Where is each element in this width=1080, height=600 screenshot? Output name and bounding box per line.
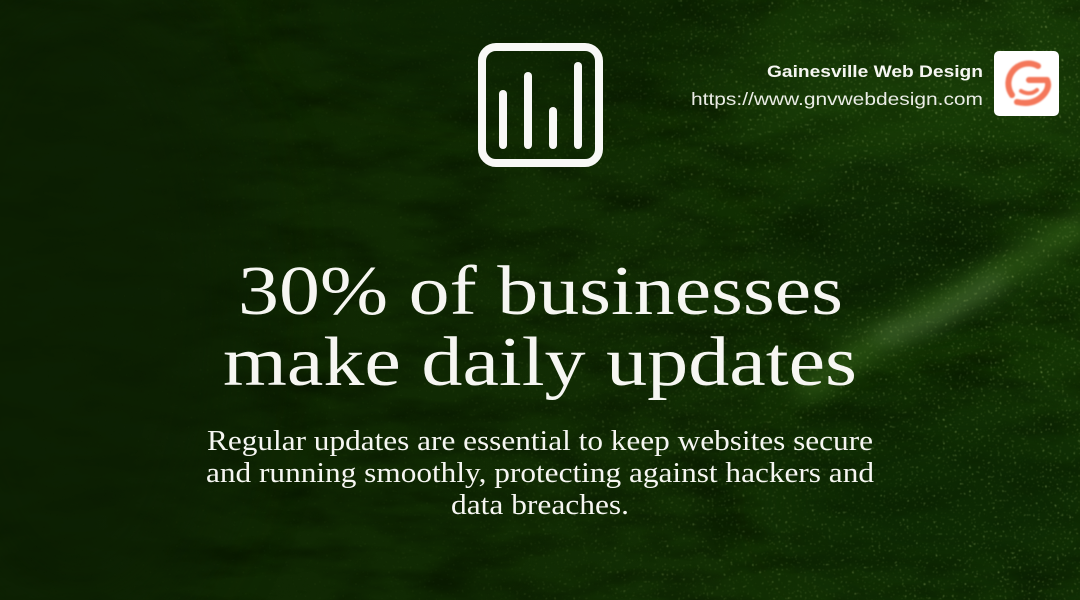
- title: make daily updates: [223, 324, 857, 401]
- description text: data breaches.: [451, 490, 629, 521]
- brand text: company name and URL: [691, 62, 983, 109]
- description text: [206, 426, 874, 521]
- website URL: https://www.gnvwebdesign.com: [691, 89, 983, 109]
- title: 30% of businesses: [238, 253, 843, 330]
- bar 2: [524, 72, 532, 149]
- description text: and running smoothly, protecting against hackers and: [206, 458, 874, 489]
- description text: Regular updates are essential to keep websites secure: [207, 426, 873, 457]
- bar 4: [574, 62, 582, 149]
- logo: white tile with orange G mark: [994, 51, 1059, 116]
- title: [223, 253, 857, 401]
- icon: bar chart in rounded square: [482, 47, 599, 163]
- bar 1: [499, 90, 507, 149]
- bar 3: [549, 107, 557, 149]
- company name: Gainesville Web Design: [767, 62, 983, 81]
